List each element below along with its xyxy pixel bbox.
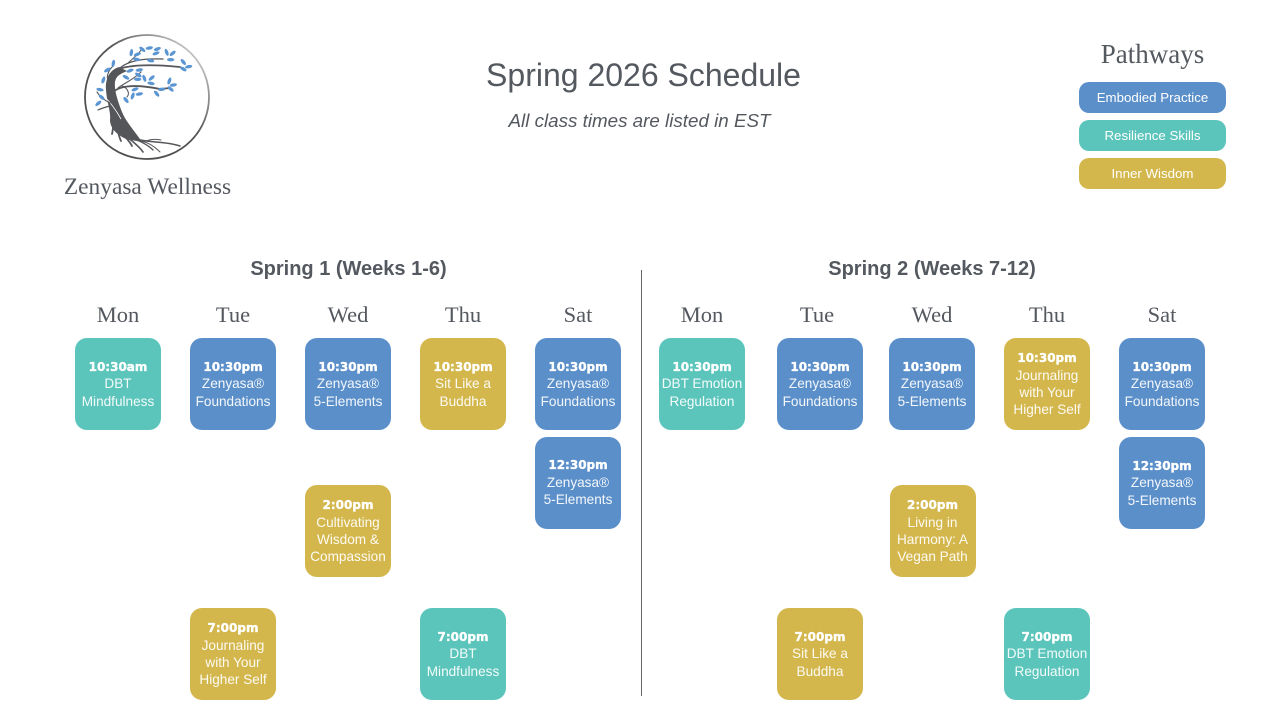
class: wed 10:30pm: 5-Elements xyxy=(314,394,382,409)
title: Spring 2026 Schedule xyxy=(486,57,801,93)
class: thu 7:00pm: 7:00pm xyxy=(438,630,488,644)
class: wed 2:00pm xyxy=(890,485,976,577)
heading: spring 2: Spring 2 (Weeks 7-12) xyxy=(828,258,1036,280)
class: wed 10:30pm: 10:30pm xyxy=(902,360,962,374)
day: mon: Mon xyxy=(97,302,139,327)
class: tue 10:30pm: 10:30pm xyxy=(790,360,850,374)
class: tue 7:00pm xyxy=(190,608,276,700)
day: mon: Mon xyxy=(681,302,723,327)
legend item: embodied practice: Embodied Practice xyxy=(1097,90,1208,105)
class: thu 7:00pm xyxy=(1004,608,1090,700)
day: tue: Tue xyxy=(216,302,250,327)
class: tue 7:00pm xyxy=(777,608,863,700)
class: sat 10:30pm: Zenyasa® xyxy=(1131,376,1193,391)
class: sat 10:30pm xyxy=(535,338,621,430)
class: thu 10:30pm: Higher Self xyxy=(1013,402,1081,417)
class: tue 10:30pm: Foundations xyxy=(196,394,270,409)
class: wed 2:00pm: 2:00pm xyxy=(907,498,958,512)
class: mon 10:30pm: Regulation xyxy=(670,394,734,409)
class: thu 7:00pm: DBT Emotion xyxy=(1007,646,1087,661)
class: sat 12:30pm xyxy=(535,436,621,528)
logo: tree in circle xyxy=(84,34,210,160)
class: tue 7:00pm: Higher Self xyxy=(199,672,267,687)
class: thu 10:30pm xyxy=(420,338,506,430)
class: tue 7:00pm: Buddha xyxy=(797,664,843,679)
class: thu 10:30pm: Journaling xyxy=(1016,368,1078,383)
day: thu: Thu xyxy=(445,302,481,327)
legend item: inner wisdom xyxy=(1079,158,1226,189)
legend item: inner wisdom: Inner Wisdom xyxy=(1111,166,1194,181)
class: thu 10:30pm: Sit Like a xyxy=(435,376,491,391)
class: mon 10:30am: Mindfulness xyxy=(82,394,154,409)
subtitle: All class times are listed in EST xyxy=(508,110,770,131)
day: sat: Sat xyxy=(1148,302,1176,327)
legend item: embodied practice xyxy=(1079,82,1226,113)
class: tue 7:00pm: 7:00pm xyxy=(208,621,258,635)
class: tue 10:30pm: Zenyasa® xyxy=(789,376,851,391)
class: tue 7:00pm: with Your xyxy=(205,655,261,670)
day: wed: Wed xyxy=(912,302,952,327)
class: mon 10:30am: DBT xyxy=(104,376,132,391)
class: sat 10:30pm xyxy=(1119,338,1205,430)
class: mon 10:30pm: DBT Emotion xyxy=(662,376,742,391)
class: tue 7:00pm: Sit Like a xyxy=(792,646,848,661)
class: sat 10:30pm: Foundations xyxy=(1125,394,1199,409)
class: wed 10:30pm: Zenyasa® xyxy=(901,376,963,391)
class: sat 12:30pm: Zenyasa® xyxy=(1131,475,1193,490)
day: thu: Thu xyxy=(1029,302,1065,327)
class: tue 10:30pm: 10:30pm xyxy=(203,360,263,374)
class: thu 10:30pm: 10:30pm xyxy=(433,360,493,374)
class: wed 2:00pm: Wisdom & xyxy=(317,532,379,547)
legend item: resilience skills xyxy=(1079,120,1226,151)
class: tue 10:30pm: Zenyasa® xyxy=(202,376,264,391)
legend item: resilience skills: Resilience Skills xyxy=(1104,128,1201,143)
class: wed 10:30pm xyxy=(889,338,975,430)
class: mon 10:30pm xyxy=(659,338,745,430)
class: sat 12:30pm: 12:30pm xyxy=(1132,459,1192,473)
class: sat 10:30pm: Zenyasa® xyxy=(547,376,609,391)
class: wed 10:30pm: Zenyasa® xyxy=(317,376,379,391)
class: sat 12:30pm: 5-Elements xyxy=(544,492,612,507)
center divider xyxy=(640,270,642,696)
class: wed 2:00pm: Vegan Path xyxy=(897,549,968,564)
class: sat 12:30pm xyxy=(1119,437,1205,529)
class: tue 7:00pm: 7:00pm xyxy=(795,630,845,644)
class: thu 7:00pm: 7:00pm xyxy=(1022,630,1072,644)
heading: spring 1: Spring 1 (Weeks 1-6) xyxy=(250,258,447,280)
class: sat 10:30pm: 10:30pm xyxy=(1132,360,1192,374)
legend: pathways xyxy=(1079,39,1226,189)
class: thu 10:30pm: Buddha xyxy=(440,394,486,409)
class: mon 10:30am: 10:30am xyxy=(89,360,147,374)
day: wed: Wed xyxy=(328,302,368,327)
class: thu 10:30pm xyxy=(1004,338,1090,430)
class: thu 7:00pm: Regulation xyxy=(1014,664,1080,679)
class: tue 7:00pm: Journaling xyxy=(202,638,264,653)
class: tue 10:30pm: Foundations xyxy=(783,394,857,409)
class: wed 2:00pm: Living in xyxy=(908,515,957,530)
class: wed 2:00pm: Cultivating xyxy=(316,515,380,530)
class: wed 10:30pm: 10:30pm xyxy=(318,360,378,374)
class: wed 2:00pm: 2:00pm xyxy=(323,498,373,512)
class: sat 12:30pm: 5-Elements xyxy=(1128,493,1196,508)
class: thu 10:30pm: 10:30pm xyxy=(1017,351,1077,365)
class: wed 2:00pm: Compassion xyxy=(310,549,386,564)
class: thu 10:30pm: with Your xyxy=(1019,385,1075,400)
class: sat 10:30pm: Foundations xyxy=(541,394,615,409)
class: tue 10:30pm xyxy=(777,338,863,430)
class: wed 10:30pm xyxy=(305,338,391,430)
class: sat 12:30pm: Zenyasa® xyxy=(547,475,609,490)
class: thu 7:00pm: Mindfulness xyxy=(427,664,499,679)
class: wed 10:30pm: 5-Elements xyxy=(898,394,966,409)
class: tue 10:30pm xyxy=(190,338,276,430)
class: sat 10:30pm: 10:30pm xyxy=(548,360,608,374)
leaves xyxy=(94,46,193,107)
class: wed 2:00pm: Harmony: A xyxy=(897,532,968,547)
trunk xyxy=(106,67,142,142)
class: thu 7:00pm: DBT xyxy=(449,646,477,661)
day: tue: Tue xyxy=(800,302,834,327)
class: mon 10:30pm: 10:30pm xyxy=(672,360,732,374)
class: mon 10:30am xyxy=(75,338,161,430)
class: thu 7:00pm xyxy=(420,608,506,700)
day: sat: Sat xyxy=(564,302,592,327)
brand name: Zenyasa Wellness xyxy=(64,174,231,200)
class: wed 2:00pm xyxy=(305,485,391,577)
class: sat 12:30pm: 12:30pm xyxy=(548,458,608,472)
legend heading: Pathways xyxy=(1101,39,1204,69)
